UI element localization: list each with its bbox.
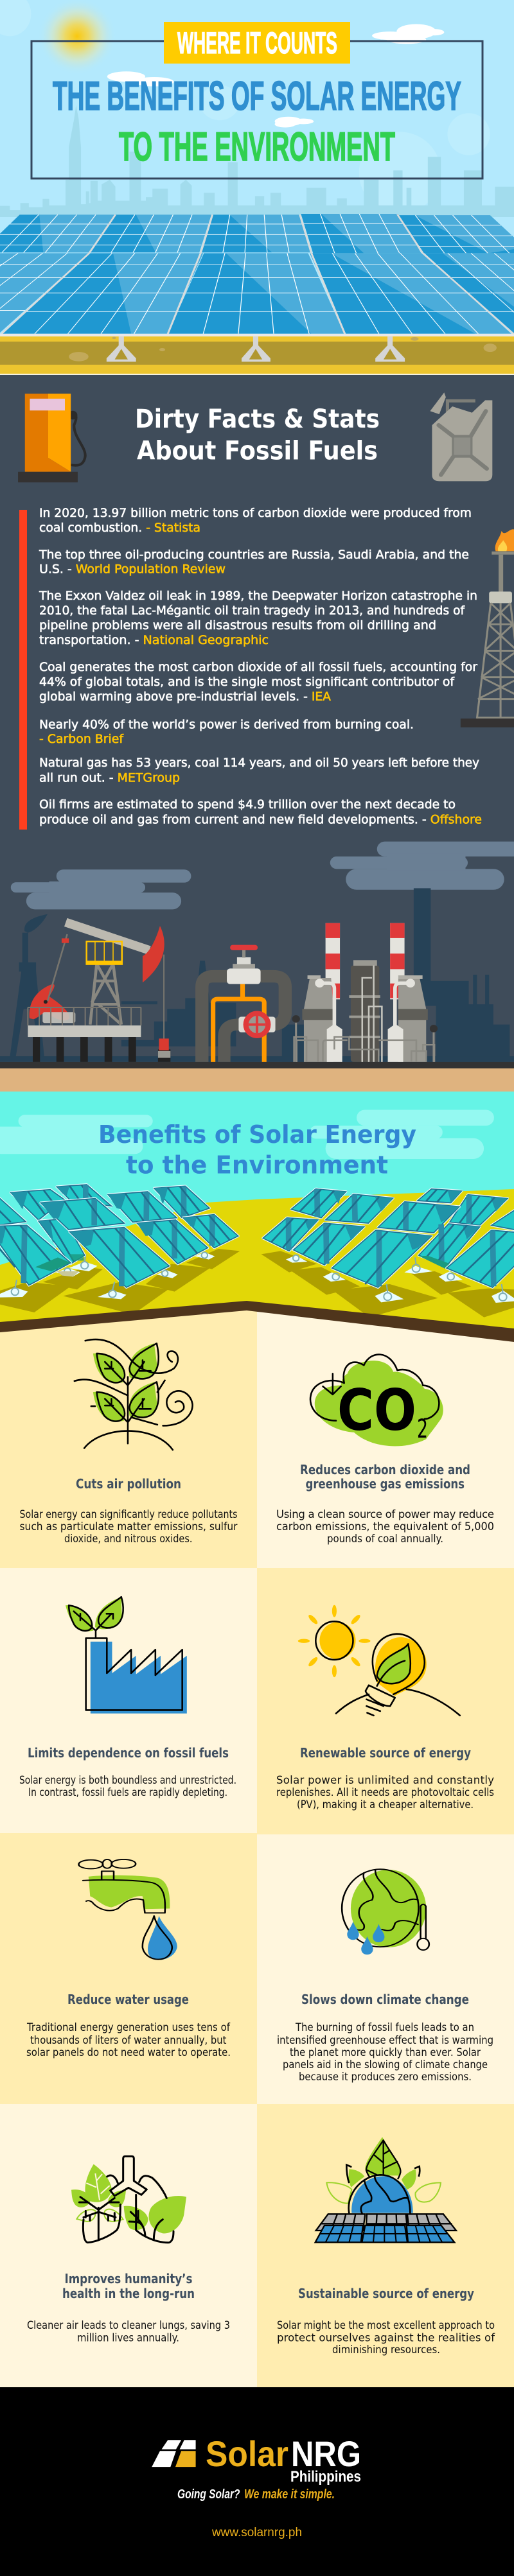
pump jack bbox=[28, 918, 170, 1062]
icon: SolarNRG logo mark bbox=[152, 2440, 196, 2467]
body text: Using a clean source of power may reduce bbox=[276, 1508, 494, 1520]
body text: protect ourselves against the realities of bbox=[277, 2332, 495, 2344]
heading: Reduce water usage bbox=[67, 1992, 189, 2007]
text block: facts and stats bbox=[39, 506, 482, 827]
heading: dirty facts: Dirty Facts & Stats bbox=[135, 405, 380, 434]
panel: benefits header sky bbox=[0, 1092, 514, 1323]
text block: facts and stats: - Carbon Brief bbox=[39, 732, 124, 746]
panel: dirty facts background bbox=[0, 375, 514, 1062]
body text: (PV), making it a cheaper alternative. bbox=[297, 1798, 474, 1811]
panel stands and rocks bbox=[69, 336, 497, 361]
text block: facts and stats: U.S. - World Population Review bbox=[39, 562, 226, 577]
text block: facts and stats: 44% of global totals, and is the single most significant contributor of bbox=[39, 675, 455, 689]
text block: facts and stats: pipeline problems were all disastrous results from oil drilling and bbox=[39, 618, 436, 632]
card: slows down climate change bbox=[277, 1869, 493, 2083]
body text: In contrast, fossil fuels are rapidly depleting. bbox=[28, 1786, 227, 1798]
heading: health in the long-run bbox=[62, 2286, 195, 2301]
body text bbox=[276, 1774, 494, 1811]
hero illustration bbox=[0, 0, 514, 336]
text block: facts and stats: 2010, the fatal Lac-Mégantic oil train tragedy in 2013, and hundreds of bbox=[39, 604, 465, 618]
sand strip bbox=[0, 1068, 514, 1092]
title bbox=[53, 74, 461, 170]
logo wordmark: NRG bbox=[291, 2433, 361, 2474]
text block: facts and stats: In 2020, 13.97 billion metric tons of carbon dioxide were produced from bbox=[39, 506, 472, 520]
body text: carbon emissions, the equivalent of 5,000 bbox=[276, 1520, 494, 1533]
tagline: We make it simple. bbox=[244, 2487, 335, 2502]
heading: benefits: Benefits of Solar Energy bbox=[98, 1120, 416, 1149]
body text bbox=[277, 2021, 493, 2083]
aqua clouds bbox=[0, 1110, 494, 1159]
body text: such as particulate matter emissions, sulfur bbox=[19, 1520, 238, 1533]
banner: where it counts: WHERE IT COUNTS bbox=[177, 26, 337, 60]
icon: oil rig with flame bbox=[461, 529, 514, 727]
panel: hero sky and solar array bbox=[0, 0, 514, 375]
heading: benefits bbox=[98, 1120, 416, 1179]
card: improves humanity's health bbox=[27, 2156, 230, 2344]
yellow ground bbox=[0, 1189, 514, 1332]
body text: because it produces zero emissions. bbox=[299, 2071, 472, 2083]
text block: facts and stats: global warming above pre-industrial levels. - IEA bbox=[39, 690, 331, 704]
body text: dioxide, and nitrous oxides. bbox=[64, 1533, 193, 1545]
heading: benefits: to the Environment bbox=[126, 1151, 388, 1179]
text block: facts and stats: Oil firms are estimated to spend $4.9 trillion over the next decade to bbox=[39, 797, 456, 812]
ground bbox=[0, 336, 514, 342]
ground strip bbox=[0, 1062, 514, 1068]
body text: Solar energy is both boundless and unrestricted. bbox=[19, 1774, 236, 1786]
body text: Solar energy can significantly reduce pollutants bbox=[19, 1508, 238, 1520]
heading: Renewable source of energy bbox=[300, 1745, 471, 1761]
red bar bbox=[19, 510, 27, 830]
icon: jerry can bbox=[430, 392, 492, 481]
text block: facts and stats: Coal generates the most carbon dioxide of all fossil fuels, accounting for bbox=[39, 660, 477, 674]
body text: pounds of coal annually. bbox=[327, 1533, 443, 1545]
body text bbox=[19, 1508, 238, 1545]
icon: plant in wind bbox=[75, 1339, 193, 1450]
frame around title bbox=[31, 41, 483, 178]
icon: CO2 cloud: CO bbox=[337, 1377, 416, 1443]
body text bbox=[277, 2319, 495, 2356]
tagline: Going Solar? bbox=[177, 2487, 240, 2502]
solar panels right group bbox=[261, 1189, 514, 1318]
panel: footer bbox=[0, 2387, 514, 2576]
heading: greenhouse gas emissions bbox=[306, 1476, 465, 1492]
body text: solar panels do not need water to operate. bbox=[26, 2046, 231, 2058]
text block: facts and stats: transportation. - National Geographic bbox=[39, 633, 269, 647]
icon: fuel pump bbox=[18, 394, 85, 482]
body text: thousands of liters of water annually, but bbox=[30, 2034, 227, 2046]
heading: dirty facts bbox=[135, 405, 380, 466]
heading bbox=[300, 1462, 470, 1492]
heading: Improves humanity’s bbox=[64, 2271, 193, 2286]
card: reduces carbon dioxide bbox=[276, 1355, 494, 1545]
card: sustainable source of energy bbox=[277, 2137, 495, 2356]
icon: lungs with leaves bbox=[71, 2156, 186, 2243]
icon: melting globe and thermometer bbox=[342, 1869, 429, 1954]
heading: Cuts air pollution bbox=[76, 1476, 181, 1492]
body text: Cleaner air leads to cleaner lungs, saving 3 bbox=[27, 2319, 230, 2331]
website: www.solarnrg.ph bbox=[211, 2526, 302, 2539]
body text bbox=[276, 1508, 494, 1545]
body text: the planet more quickly than ever. Solar bbox=[290, 2046, 481, 2058]
tagline bbox=[177, 2487, 335, 2502]
text block: facts and stats: Natural gas has 53 years, coal 114 years, and oil 50 years left before they bbox=[39, 756, 479, 770]
panel: benefit cards backgrounds bbox=[0, 1307, 514, 2387]
body text: The burning of fossil fuels leads to an bbox=[295, 2021, 474, 2033]
logo wordmark bbox=[206, 2433, 361, 2485]
icon: globe, leaves and solar panels bbox=[315, 2137, 456, 2242]
background silhouette bbox=[0, 888, 514, 1062]
solar panels left group bbox=[0, 1185, 240, 1314]
logo wordmark: Solar bbox=[206, 2433, 288, 2474]
text block: facts and stats: all run out. - METGroup bbox=[39, 770, 180, 785]
body text bbox=[27, 2319, 230, 2344]
pipes and valves bbox=[202, 945, 285, 1062]
icon: CO2 cloud: 2 bbox=[417, 1414, 428, 1444]
text block: facts and stats: The top three oil-producing countries are Russia, Saudi Arabia, and the bbox=[39, 548, 469, 562]
solar panel array bbox=[0, 214, 514, 336]
illustration: oil and refinery scene bbox=[0, 842, 514, 1062]
text block: facts and stats: coal combustion. - Statista bbox=[39, 521, 200, 535]
heading: Slows down climate change bbox=[301, 1992, 469, 2007]
icon: factory with leaves bbox=[66, 1597, 187, 1714]
body text: million lives annually. bbox=[77, 2332, 179, 2344]
body text: replenishes. All it needs are photovoltaic cells bbox=[276, 1786, 494, 1798]
text block: facts and stats: produce oil and gas from current and new field developments. - Offshore bbox=[39, 813, 482, 827]
banner: where it counts bbox=[164, 22, 350, 64]
heading: dirty facts: About Fossil Fuels bbox=[137, 437, 378, 466]
body text: Solar power is unlimited and constantly bbox=[276, 1774, 494, 1786]
heading: Limits dependence on fossil fuels bbox=[28, 1745, 229, 1761]
body text bbox=[19, 1774, 236, 1798]
refinery bbox=[292, 923, 438, 1062]
card: reduce water usage bbox=[26, 1859, 231, 2058]
smog clouds bbox=[11, 842, 514, 909]
card: cuts air pollution bbox=[19, 1339, 238, 1545]
heading: Reduces carbon dioxide and bbox=[300, 1462, 470, 1477]
brown border bbox=[0, 1301, 514, 1342]
text block: facts and stats: Nearly 40% of the world’s power is derived from burning coal. bbox=[39, 718, 414, 732]
logo wordmark: Philippines bbox=[290, 2468, 361, 2485]
body text: diminishing resources. bbox=[332, 2344, 440, 2356]
card: renewable source of energy bbox=[276, 1605, 494, 1811]
text block: facts and stats: The Exxon Valdez oil leak in 1989, the Deepwater Horizon catastrophe in bbox=[39, 589, 477, 603]
body text: Traditional energy generation uses tens of bbox=[26, 2021, 231, 2033]
card: limits dependence on fossil fuels bbox=[19, 1597, 236, 1798]
icon: sun and light bulb bbox=[298, 1605, 460, 1716]
body text: panels aid in the slowing of climate change bbox=[283, 2058, 488, 2071]
icon: faucet and drop bbox=[78, 1859, 177, 1960]
heading: Sustainable source of energy bbox=[298, 2286, 474, 2301]
heading bbox=[62, 2271, 195, 2301]
body text bbox=[26, 2021, 231, 2058]
icon: CO2 cloud bbox=[310, 1355, 443, 1446]
body text: intensified greenhouse effect that is warming bbox=[277, 2034, 493, 2046]
